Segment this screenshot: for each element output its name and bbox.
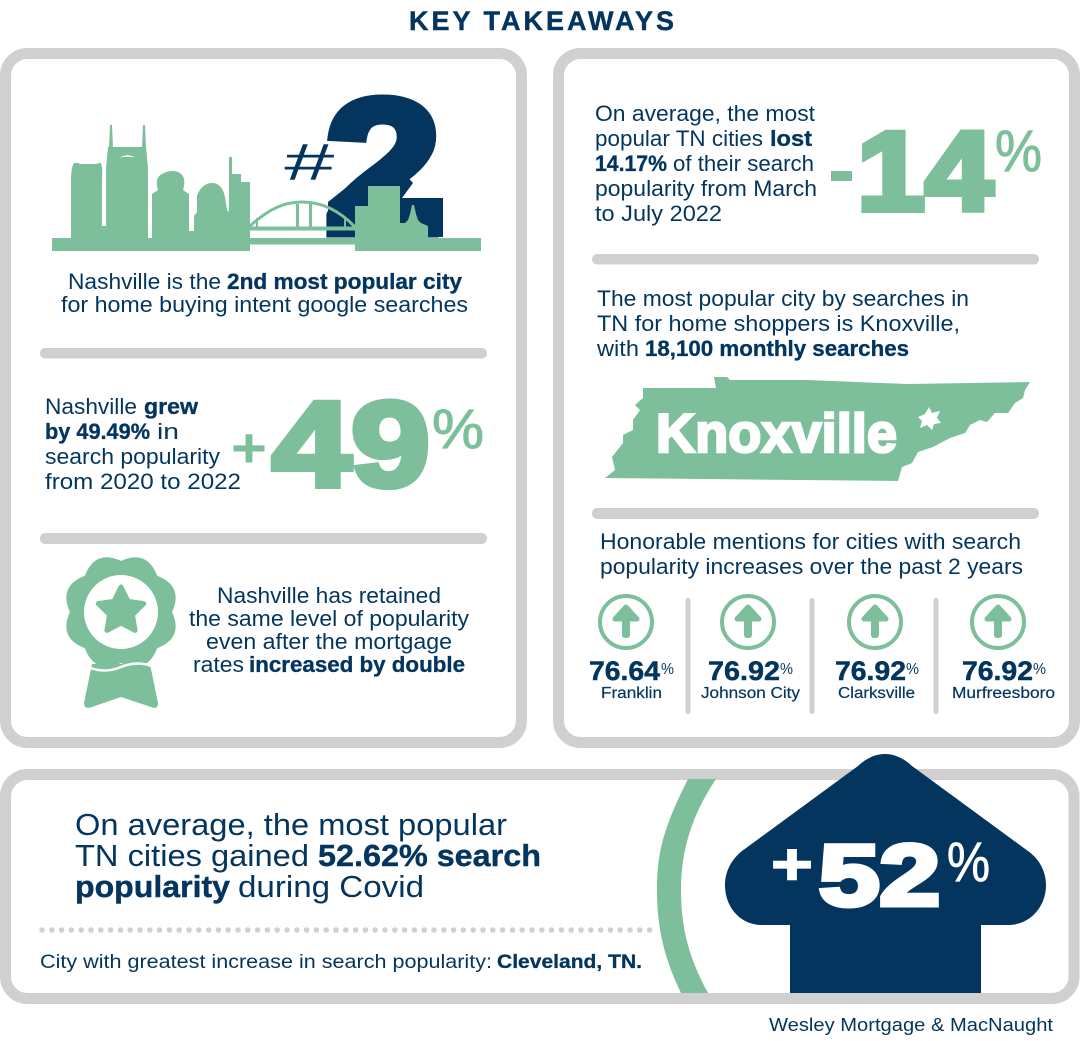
- text: Nashville growth: by 49.49%: [45, 419, 150, 444]
- stat: Johnson City: 76.92: [708, 656, 780, 686]
- arrow with plus 52 percent: +: [771, 832, 813, 897]
- stat: Johnson City: Johnson City: [701, 685, 800, 702]
- text: average search loss: popularity from March: [595, 176, 817, 201]
- map: Tennessee with Knoxville: Knoxville: [656, 402, 897, 464]
- text: most popular city: The most popular city by searches in: [597, 286, 969, 311]
- stat: Johnson City: [701, 596, 800, 702]
- big number: minus 14 percent: %: [995, 119, 1042, 184]
- text: retained popularity: Nashville has retained: [217, 583, 441, 608]
- text: average Covid gain: TN cities gained: [75, 838, 309, 873]
- big number: plus 49 percent: %: [432, 397, 484, 460]
- stat: Franklin: 76.64: [589, 656, 660, 686]
- text: average search loss: to July 2022: [595, 201, 722, 226]
- text: average Covid gain: popularity: [75, 869, 231, 904]
- stat: Johnson City: %: [780, 661, 793, 678]
- text: retained popularity: increased by double: [249, 652, 465, 677]
- stat: Clarksville: %: [906, 661, 919, 678]
- stat: Murfreesboro: Murfreesboro: [952, 685, 1055, 702]
- text: average search loss: popular TN cities: [595, 126, 763, 151]
- arrow with plus 52 percent: [725, 754, 1046, 993]
- stat: Franklin: %: [661, 661, 674, 678]
- big number: plus 49 percent: +: [231, 416, 267, 479]
- panel: Covid gains: [6, 754, 1074, 998]
- text: honorable mentions: [600, 529, 1023, 579]
- text: most popular city: with: [596, 336, 639, 361]
- text: average search loss: of their search: [673, 151, 814, 176]
- text: average search loss: 14.17%: [595, 151, 667, 176]
- stat: Murfreesboro: [952, 596, 1055, 702]
- big number: plus 49 percent: 49: [272, 376, 430, 512]
- stat: Clarksville: 76.92: [835, 656, 906, 686]
- text: average search loss: On average, the most: [595, 101, 815, 126]
- text: Nashville growth: search popularity: [45, 444, 220, 469]
- text: most popular city: [596, 286, 969, 361]
- text: greatest increase city: City with greatest increase in search popularity:: [40, 952, 492, 973]
- text: honorable mentions: popularity increases over the past 2 years: [600, 554, 1023, 579]
- stat: Clarksville: Clarksville: [838, 685, 915, 702]
- text: greatest increase city: Cleveland, TN.: [497, 952, 642, 973]
- big number: minus 14 percent: [831, 109, 1042, 234]
- arrow with plus 52 percent: %: [947, 830, 990, 893]
- icon: number two: #: [283, 134, 335, 192]
- decorative arc: [657, 779, 716, 993]
- icon: number two: [283, 59, 443, 274]
- text: retained popularity: [189, 583, 469, 677]
- title: KEY TAKEAWAYS: [409, 6, 674, 36]
- text: Nashville growth: in: [157, 419, 179, 444]
- big number: plus 49 percent: [231, 376, 484, 512]
- text: second most popular city: Nashville is the: [68, 269, 221, 294]
- text: retained popularity: the same level of popularity: [189, 606, 469, 631]
- stat: Franklin: Franklin: [601, 685, 662, 702]
- text: most popular city: TN for home shoppers is Knoxville,: [597, 311, 960, 336]
- text: average Covid gain: [75, 807, 541, 904]
- map: Tennessee with Knoxville: [605, 377, 1030, 481]
- text: Nashville growth: grew: [144, 394, 199, 419]
- text: average search loss: [595, 101, 817, 226]
- big number: minus 14 percent: 14: [857, 109, 993, 234]
- text: average search loss: lost: [770, 126, 813, 151]
- stat: Murfreesboro: %: [1033, 661, 1046, 678]
- icon: number two: 2: [324, 59, 442, 274]
- text: Nashville growth: Nashville: [45, 394, 137, 419]
- icon: award ribbon: [67, 558, 175, 708]
- text: most popular city: 18,100 monthly searches: [645, 336, 909, 361]
- stat: Clarksville: [835, 596, 919, 702]
- icon: Nashville skyline: [52, 125, 481, 252]
- text: second most popular city: 2nd most popular city: [227, 269, 463, 294]
- text: average Covid gain: during Covid: [238, 869, 424, 904]
- panel: Nashville: [6, 54, 522, 742]
- text: average Covid gain: On average, the most popular: [75, 807, 507, 842]
- text: Nashville growth: from 2020 to 2022: [45, 469, 241, 494]
- text: greatest increase city: [40, 952, 642, 973]
- text: Nashville growth: [45, 394, 241, 494]
- source credit: Wesley Mortgage & MacNaught: [769, 1015, 1053, 1035]
- text: retained popularity: even after the mortgage: [206, 629, 452, 654]
- text: average Covid gain: 52.62% search: [318, 838, 541, 873]
- text: second most popular city: [61, 269, 468, 317]
- panel: Tennessee cities: [558, 54, 1074, 742]
- stat: Murfreesboro: 76.92: [962, 656, 1033, 686]
- text: honorable mentions: Honorable mentions for cities with search: [600, 529, 1021, 554]
- stat: Franklin: [589, 596, 674, 702]
- text: retained popularity: rates: [193, 652, 244, 677]
- arrow with plus 52 percent: 52: [819, 828, 940, 924]
- text: second most popular city: for home buying intent google searches: [61, 292, 468, 317]
